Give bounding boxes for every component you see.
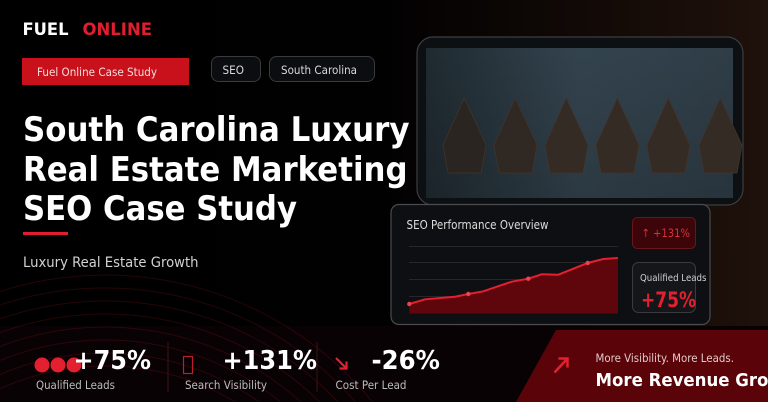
tag: SEO: SEO [222, 63, 244, 77]
badge: case study [22, 58, 189, 85]
stat: cost per lead: Cost Per Lead [336, 378, 406, 392]
icon: down arrow [336, 358, 346, 368]
call to action banner: More Visibility. More Leads. [596, 351, 734, 365]
stat: cost per lead [336, 346, 440, 392]
logo: ONLINE [82, 20, 152, 40]
line chart [407, 246, 618, 314]
tablet mockup [417, 37, 743, 205]
stat box: qualified leads [632, 262, 706, 312]
subtitle: Luxury Real Estate Growth [23, 255, 198, 271]
panel heading: SEO Performance Overview [406, 218, 549, 232]
stat: search visibility: Search Visibility [185, 378, 267, 392]
panel: SEO performance overview [391, 204, 710, 324]
tablet screen [426, 48, 733, 198]
title: South Carolina Luxury [23, 110, 410, 149]
stat pill: +131% [632, 218, 696, 248]
tag: South Carolina [270, 56, 374, 82]
stat: search visibility: +131% [222, 346, 317, 376]
stat: qualified leads: Qualified Leads [36, 378, 115, 392]
stat: qualified leads: +75% [74, 346, 151, 376]
title: Real Estate Marketing [23, 150, 408, 189]
icon: missing glyph box [184, 356, 192, 374]
tag: South Carolina: South Carolina [281, 63, 357, 77]
badge: case study: Fuel Online Case Study [37, 65, 157, 79]
stat: cost per lead: -26% [372, 346, 440, 376]
stat: search visibility [184, 346, 317, 392]
title [23, 110, 410, 228]
tag: SEO [212, 56, 260, 82]
property silhouettes [443, 98, 742, 173]
logo: FUEL [22, 20, 69, 40]
title: SEO Case Study [23, 189, 297, 228]
icon: up arrow [554, 358, 568, 372]
call to action banner [516, 330, 768, 402]
icon: three dots [34, 358, 82, 372]
stat box: qualified leads: Qualified Leads [640, 273, 706, 284]
stat: qualified leads [34, 346, 151, 392]
logo [22, 20, 152, 40]
stat pill: +131%: ↑ +131% [642, 226, 690, 240]
stat box: qualified leads: +75% [641, 288, 696, 312]
title accent rule [23, 232, 68, 235]
